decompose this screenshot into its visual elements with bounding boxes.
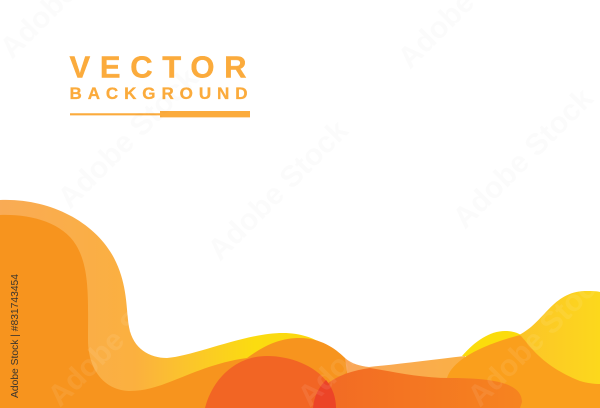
heading: vector: VECTOR [70,50,246,84]
wave: small yellow hump [462,331,521,360]
stock id label: Adobe Stock | #831743454 [9,274,21,398]
watermarks on waves [42,260,600,408]
wave: inner orange [0,215,352,408]
wave: bottom orange blob [313,368,522,408]
wave: right orange hump [440,335,600,408]
wave: blob and circle overlap [313,380,336,408]
wave: right yellow hump [519,291,600,390]
watermarks [0,0,600,267]
wave: red-orange circle [205,356,336,408]
title: vector background [70,50,250,117]
subheading: background: BACKGROUND [70,84,248,103]
underline [70,111,250,117]
wave: light orange band [320,345,470,390]
wave: outer yellow-orange band [0,200,326,408]
